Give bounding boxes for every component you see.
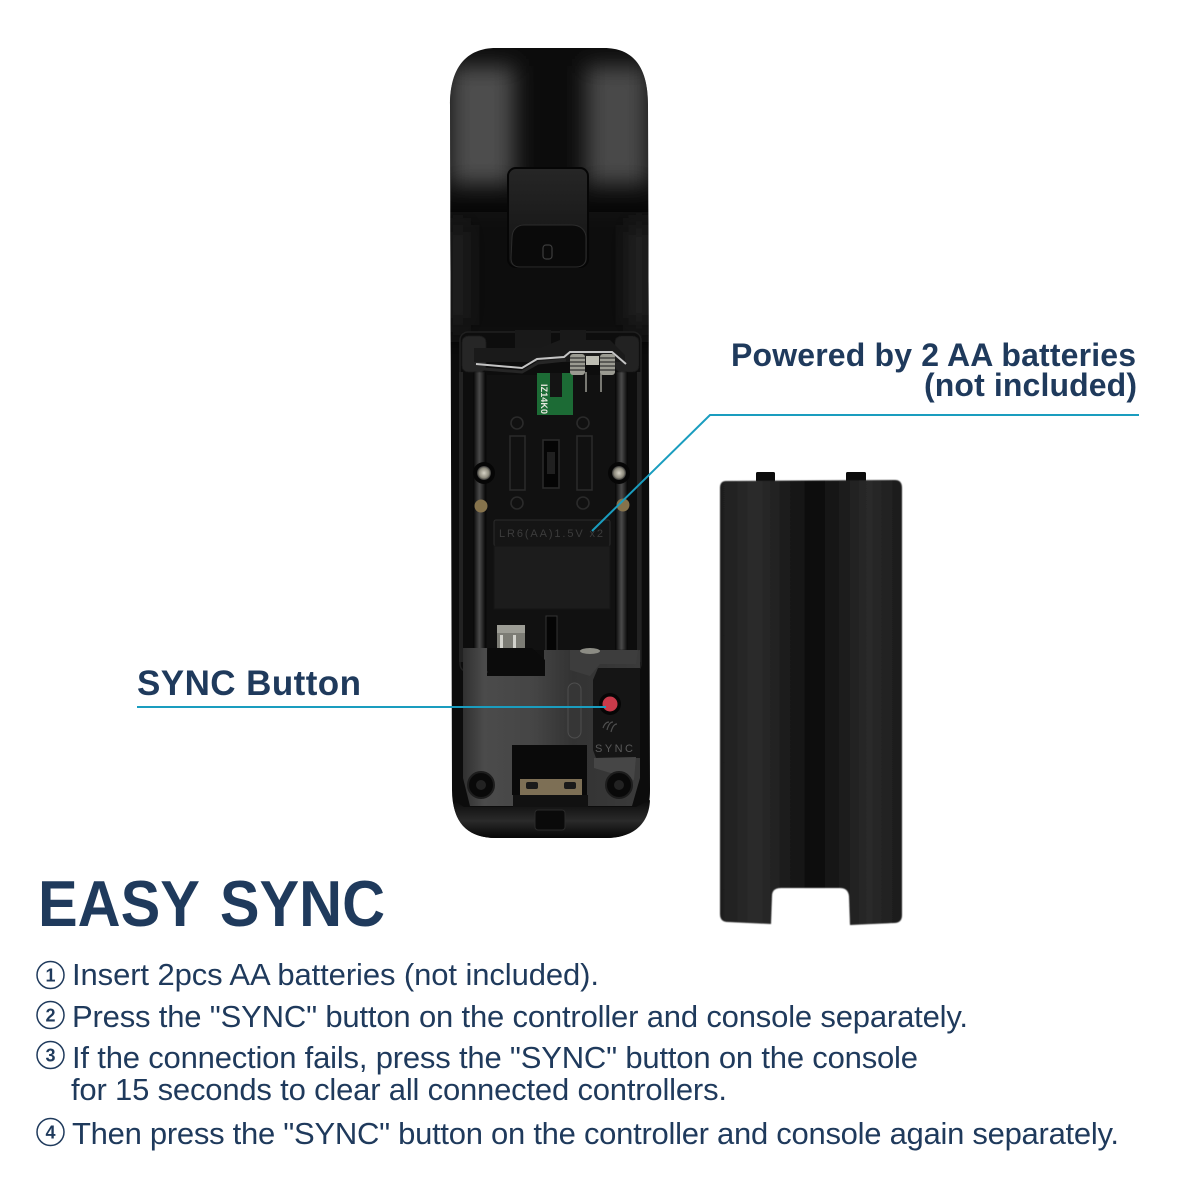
step 2: Press the "SYNC" button on the controller and console separately. bbox=[72, 999, 968, 1034]
callout: sync button: SYNC Button bbox=[137, 664, 361, 703]
battery compartment bbox=[459, 330, 641, 672]
callout: batteries: (not included) bbox=[924, 367, 1137, 403]
step 1: 1 bbox=[45, 966, 56, 986]
small connector pins bbox=[497, 616, 557, 654]
step 3: for 15 seconds to clear all connected controllers. bbox=[71, 1072, 727, 1107]
step 4: Then press the "SYNC" button on the controller and console again separately. bbox=[72, 1116, 1119, 1151]
screws bbox=[473, 462, 630, 512]
step 3 bbox=[37, 1040, 918, 1107]
green circuit board: IZ14K0 bbox=[539, 384, 549, 414]
battery cover bbox=[720, 472, 902, 925]
lower grey housing bbox=[463, 648, 640, 806]
bottom lip bbox=[453, 800, 650, 838]
metal contact and springs bbox=[472, 352, 626, 392]
title: EASY SYNC bbox=[38, 867, 385, 940]
SYNC button: SYNC bbox=[595, 743, 633, 755]
connector port bbox=[512, 745, 588, 809]
callout: batteries: Powered by 2 AA batteries bbox=[731, 337, 1136, 373]
callout: batteries bbox=[592, 337, 1139, 531]
step 4: 4 bbox=[45, 1122, 56, 1142]
battery label recess: LR6(AA)1.5V x2 bbox=[499, 528, 603, 540]
controller: back of remote with open battery compartment bbox=[450, 48, 650, 838]
SYNC button bbox=[595, 693, 633, 755]
green circuit board bbox=[537, 373, 573, 415]
moulded plate details bbox=[510, 417, 592, 509]
battery label recess bbox=[494, 520, 610, 609]
step 1: Insert 2pcs AA batteries (not included). bbox=[72, 957, 599, 992]
step 2: 2 bbox=[45, 1006, 56, 1026]
step 3: 3 bbox=[45, 1046, 56, 1066]
B trigger button bbox=[508, 168, 588, 267]
step 3: If the connection fails, press the "SYNC" button on the console bbox=[72, 1040, 918, 1075]
bottom screws bbox=[468, 772, 632, 798]
